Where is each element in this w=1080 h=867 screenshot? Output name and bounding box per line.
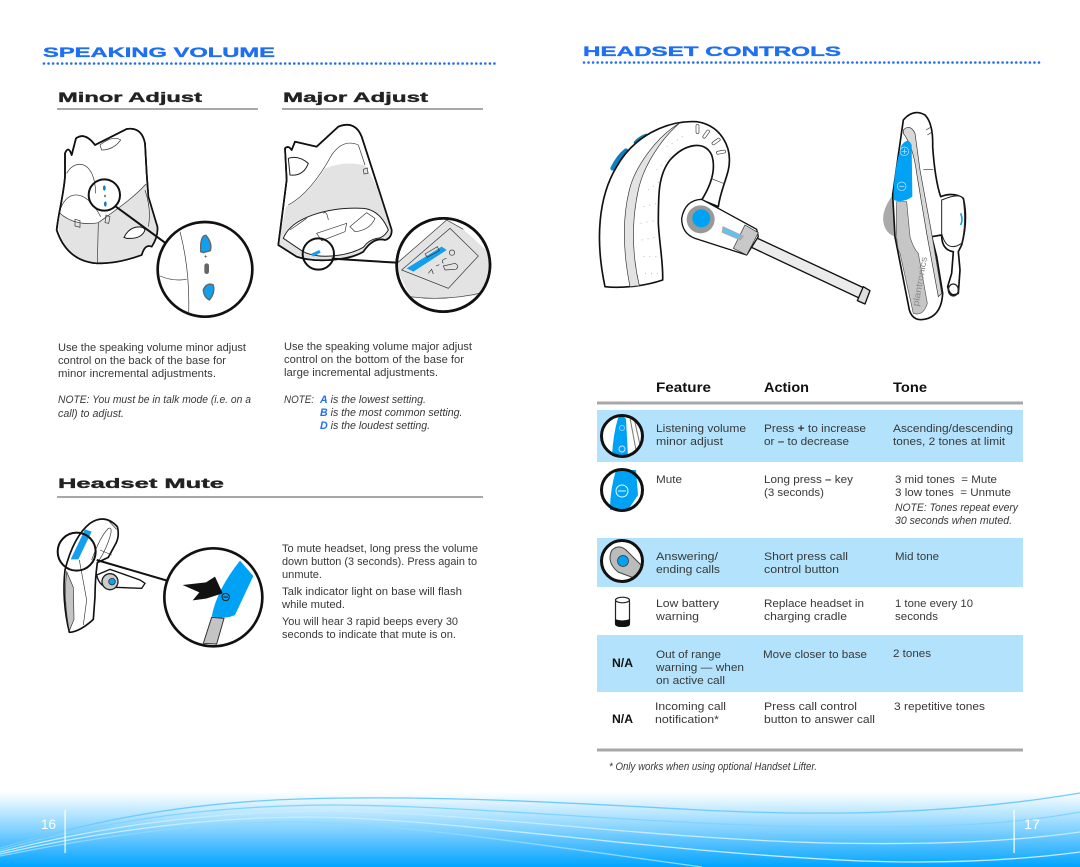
text: minor adjust description: Use the speaking volume minor adjust bbox=[58, 342, 246, 354]
row: out of range: Move closer to base bbox=[763, 649, 867, 661]
illustration: headset front view bbox=[883, 113, 965, 320]
row: listening volume: tones, 2 tones at limit bbox=[893, 436, 1005, 448]
row: incoming call: Incoming call bbox=[655, 701, 726, 713]
row: mute: NOTE: Tones repeat every bbox=[895, 502, 1019, 514]
heading: speaking volume: SPEAKING VOLUME bbox=[43, 44, 275, 60]
row: out of range: on active call bbox=[656, 675, 725, 687]
text: minor adjust description: call) to adjust. bbox=[58, 408, 124, 420]
text: major adjust description: D is the loudest setting. bbox=[320, 420, 430, 432]
text: mute instructions: seconds to indicate that mute is on. bbox=[282, 629, 456, 641]
illustration: headset front view: plantronics bbox=[910, 255, 929, 307]
footnote: * Only works when using optional Handset Lifter. bbox=[609, 761, 817, 773]
row: low battery: warning bbox=[655, 611, 699, 623]
row: answering calls bbox=[597, 538, 1023, 587]
heading: headset mute: Headset Mute bbox=[58, 475, 224, 491]
row: low battery: Low battery bbox=[656, 598, 720, 610]
row: incoming call bbox=[597, 701, 1023, 752]
row: answering calls: Short press call bbox=[764, 551, 848, 563]
text: mute instructions: You will hear 3 rapid beeps every 30 bbox=[282, 616, 458, 628]
text: major adjust description bbox=[284, 341, 472, 432]
row: mute bbox=[602, 470, 1019, 527]
icon: volume buttons bbox=[602, 416, 642, 456]
row: mute: Long press – key bbox=[764, 474, 854, 486]
footer band with page numbers: 16 bbox=[41, 816, 56, 832]
row: listening volume: Listening volume bbox=[656, 423, 746, 435]
row: out of range: N/A bbox=[612, 656, 633, 670]
row: out of range: Out of range bbox=[656, 649, 721, 661]
row: incoming call: notification* bbox=[655, 714, 719, 726]
icon: mute button bbox=[602, 470, 642, 510]
text: major adjust description: control on the bottom of the base for bbox=[284, 354, 464, 366]
row: listening volume: or – to decrease bbox=[764, 436, 849, 448]
row: out of range: 2 tones bbox=[893, 648, 931, 660]
row: mute: Mute bbox=[656, 474, 682, 486]
text: mute instructions: unmute. bbox=[282, 569, 322, 581]
row: low battery: Replace headset in bbox=[764, 598, 864, 610]
text: mute instructions: while muted. bbox=[281, 599, 345, 611]
row: listening volume: minor adjust bbox=[656, 436, 723, 448]
text: major adjust description: NOTE: bbox=[284, 394, 314, 406]
text: minor adjust description: minor incremental adjustments. bbox=[58, 368, 216, 380]
row: incoming call: button to answer call bbox=[764, 714, 875, 726]
text: minor adjust description bbox=[58, 342, 251, 420]
heading: major adjust: Major Adjust bbox=[283, 89, 429, 105]
heading: minor adjust: Minor Adjust bbox=[58, 89, 203, 105]
table header: Action bbox=[764, 379, 809, 395]
text: mute instructions bbox=[281, 543, 478, 641]
footer band with page numbers bbox=[0, 792, 1080, 867]
row: mute: (3 seconds) bbox=[764, 487, 824, 499]
row: out of range bbox=[597, 635, 1023, 692]
table header: Tone bbox=[893, 379, 927, 395]
text: mute instructions: Talk indicator light on base will flash bbox=[282, 586, 462, 598]
text: mute instructions: To mute headset, long press the volume bbox=[282, 543, 478, 555]
row: mute: 3 low tones = Unmute bbox=[895, 487, 1011, 499]
row: low battery bbox=[615, 597, 973, 627]
table header bbox=[597, 379, 1023, 404]
illustration: base minor adjust: + bbox=[204, 254, 208, 260]
text: major adjust description: Use the speaking volume major adjust bbox=[284, 341, 472, 353]
text: major adjust description: large incremental adjustments. bbox=[284, 367, 438, 379]
row: listening volume: Press + to increase bbox=[764, 423, 866, 435]
table header: Feature bbox=[656, 379, 711, 395]
row: low battery: 1 tone every 10 bbox=[895, 598, 973, 610]
row: answering calls: ending calls bbox=[656, 564, 720, 576]
illustration: headset mute bbox=[58, 519, 262, 646]
heading: headset controls: HEADSET CONTROLS bbox=[583, 43, 841, 59]
row: answering calls: Answering/ bbox=[656, 551, 718, 563]
row: low battery: charging cradle bbox=[764, 611, 847, 623]
icon: call control button bbox=[602, 540, 642, 582]
illustration: base major adjust bbox=[278, 125, 493, 312]
icon: battery bbox=[615, 597, 630, 627]
row: incoming call: N/A bbox=[612, 712, 633, 726]
row: incoming call: 3 repetitive tones bbox=[894, 701, 985, 713]
row: mute: 30 seconds when muted. bbox=[895, 515, 1012, 527]
footer band with page numbers: 17 bbox=[1024, 816, 1040, 832]
row: listening volume bbox=[597, 410, 1023, 462]
text: mute instructions: down button (3 seconds). Press again to bbox=[282, 556, 477, 568]
text: major adjust description: A is the lowest setting. bbox=[319, 394, 426, 406]
row: out of range: warning — when bbox=[655, 662, 744, 674]
row: low battery: seconds bbox=[895, 611, 938, 623]
text: major adjust description: B is the most common setting. bbox=[320, 407, 462, 419]
row: answering calls: Mid tone bbox=[895, 551, 939, 563]
illustration: base minor adjust bbox=[57, 129, 252, 317]
row: mute: 3 mid tones = Mute bbox=[895, 474, 997, 486]
row: listening volume: Ascending/descending bbox=[893, 423, 1013, 435]
text: minor adjust description: NOTE: You must be in talk mode (i.e. on a bbox=[58, 394, 251, 406]
row: incoming call: Press call control bbox=[764, 701, 857, 713]
illustration: headset side view bbox=[599, 122, 870, 304]
text: minor adjust description: control on the back of the base for bbox=[58, 355, 226, 367]
row: answering calls: control button bbox=[764, 564, 839, 576]
